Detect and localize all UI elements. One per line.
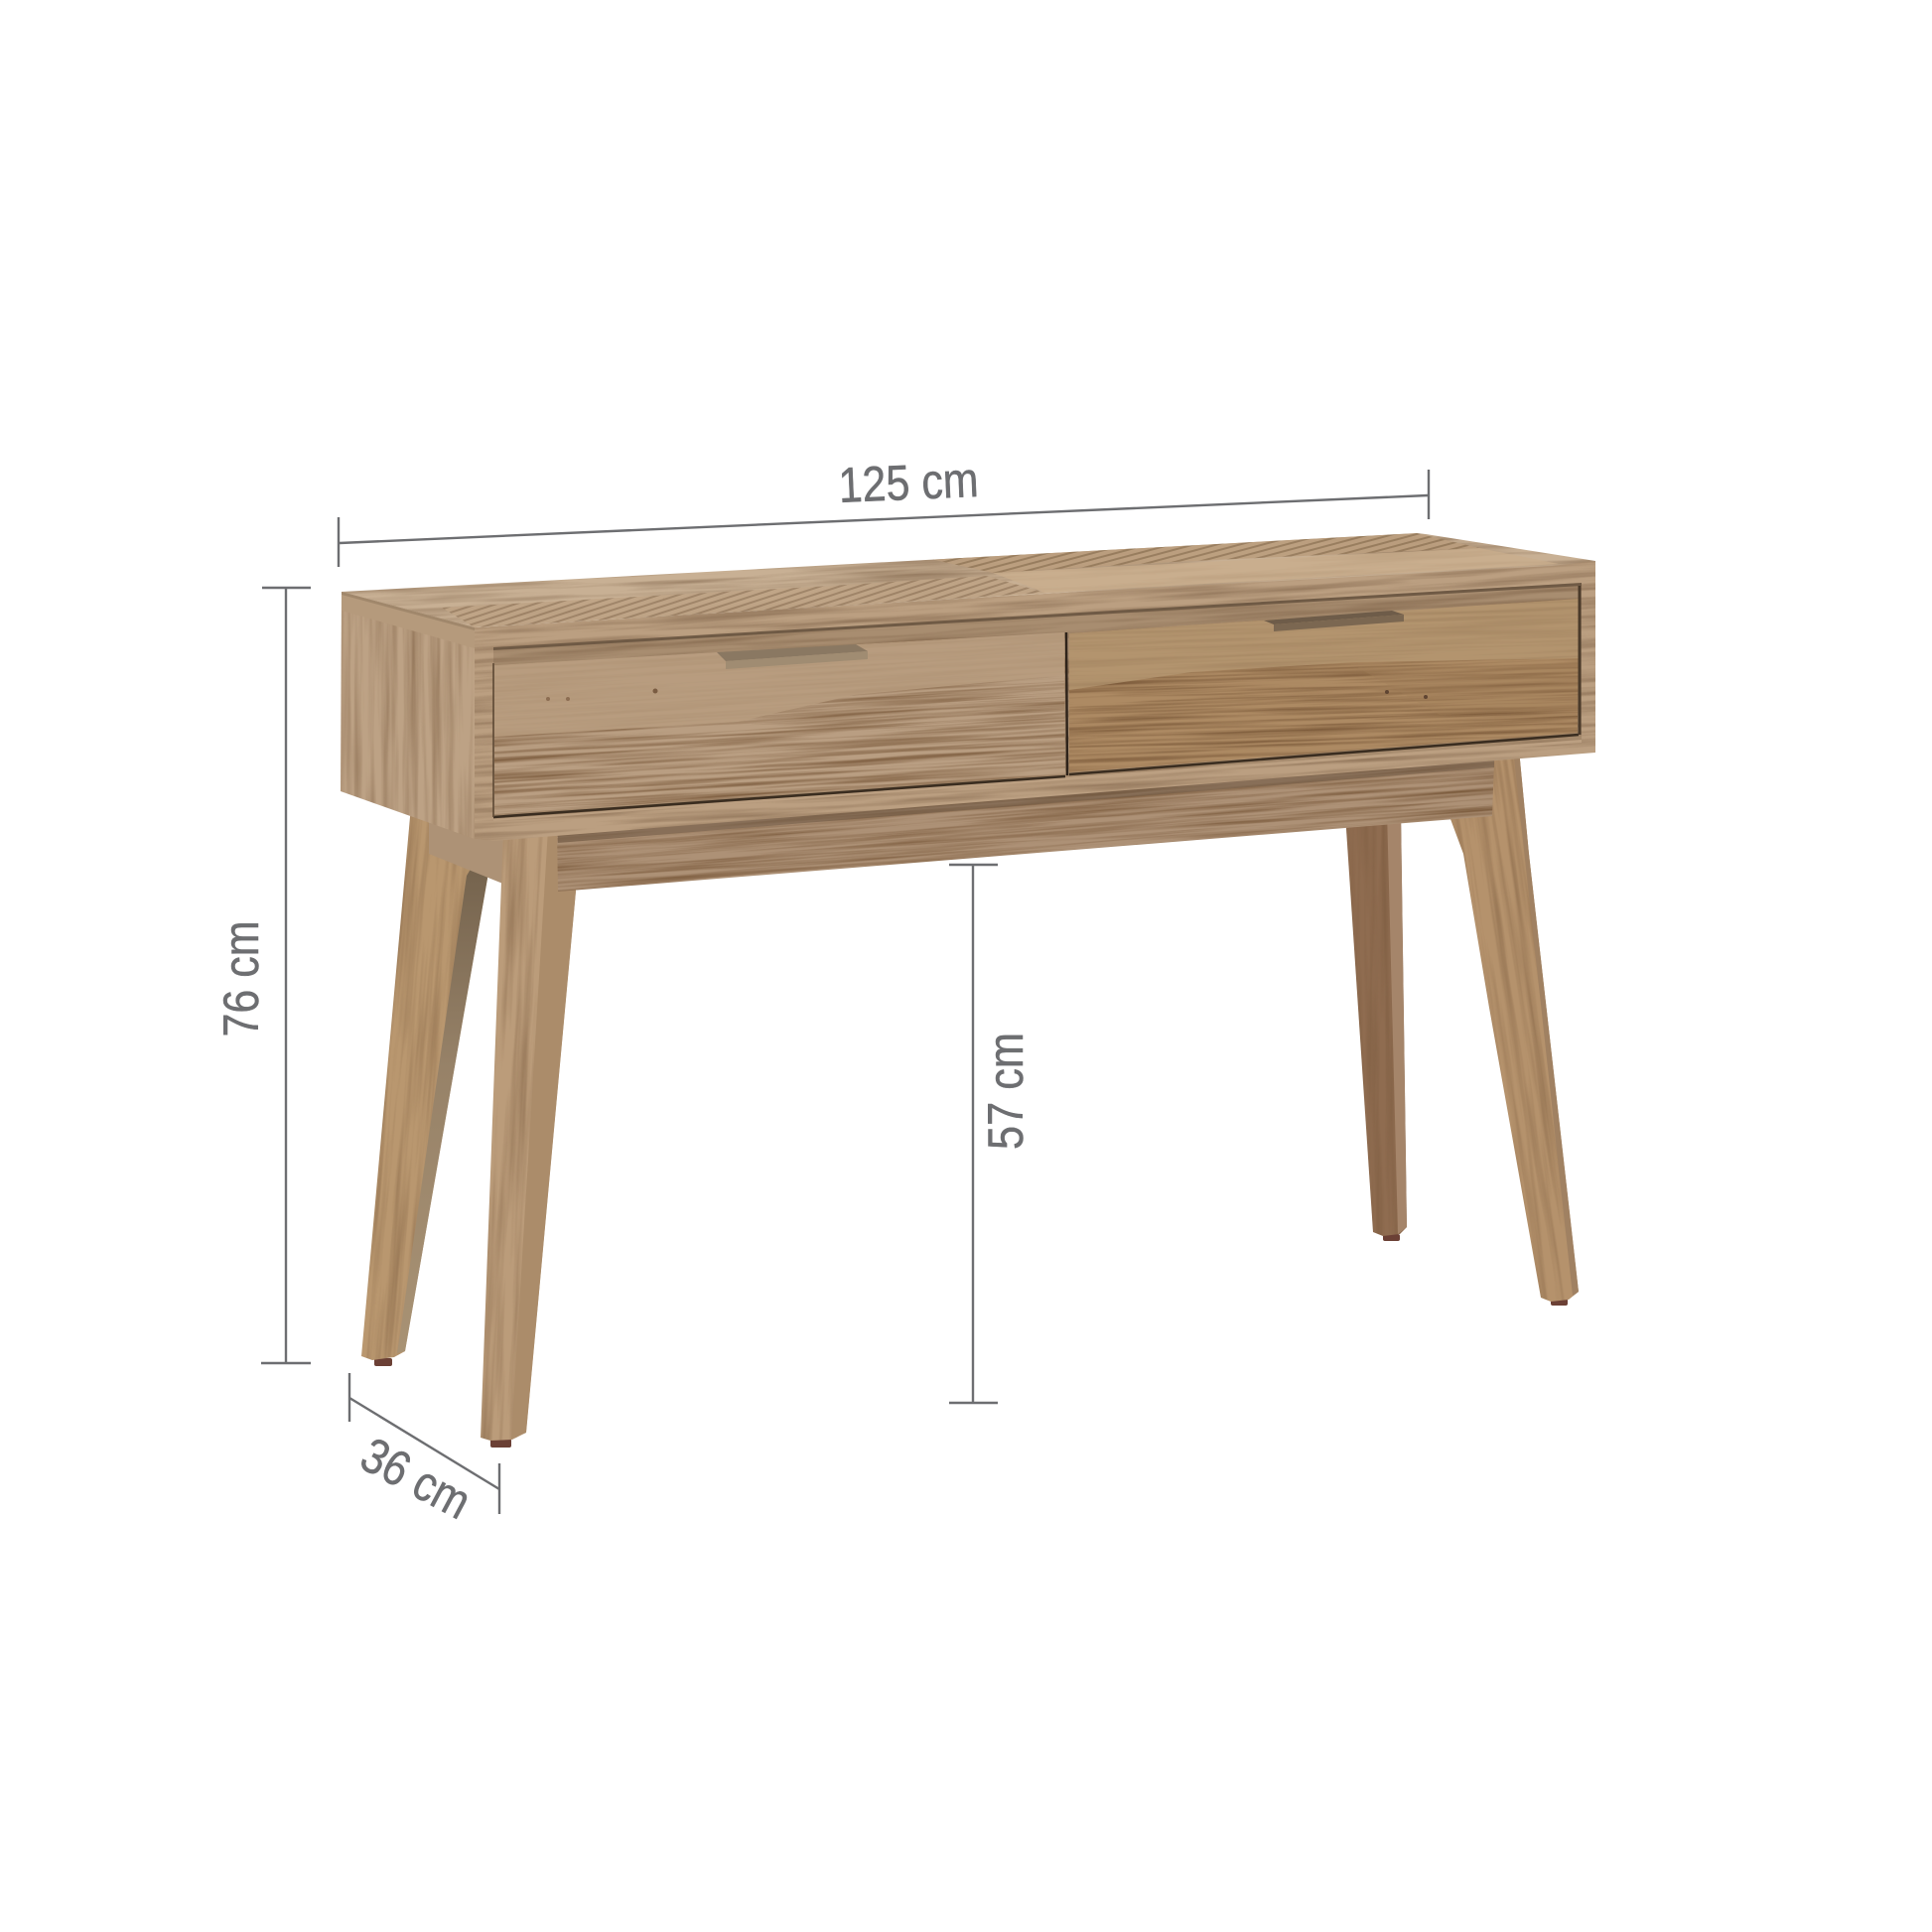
- dimension: clearance height 57 cm: 57 cm: [978, 1033, 1034, 1150]
- parquet: left diagonal panel: [442, 576, 1045, 627]
- leg: back right: [1346, 823, 1407, 1241]
- dimension: width 125 cm: 125 cm: [837, 452, 980, 513]
- leg: right front: [1450, 759, 1579, 1306]
- under-rail shadow: [558, 760, 1494, 843]
- parquet: right diagonal panel: [930, 533, 1479, 573]
- handle left: [717, 644, 868, 669]
- drawer left: [494, 632, 1065, 814]
- drawer gaps: [493, 586, 1580, 817]
- dimension: width 125 cm: [339, 452, 1429, 567]
- apron rail: [557, 760, 1494, 892]
- side panel with top board edge: [341, 592, 475, 838]
- parquet: light panel: [993, 548, 1559, 593]
- leg: front left: [481, 836, 576, 1448]
- table top: [342, 533, 1595, 630]
- front frame: [475, 561, 1595, 840]
- dimension: total height 76 cm: 76 cm: [213, 921, 269, 1036]
- dimension: depth 36 cm: [349, 1373, 499, 1530]
- table illustration: [341, 533, 1595, 1448]
- drawer right: [1069, 599, 1579, 772]
- dimension: depth 36 cm: 36 cm: [352, 1427, 480, 1530]
- leg bracket: [429, 819, 510, 887]
- handle right: [1264, 611, 1404, 631]
- leg: back left: [361, 816, 488, 1366]
